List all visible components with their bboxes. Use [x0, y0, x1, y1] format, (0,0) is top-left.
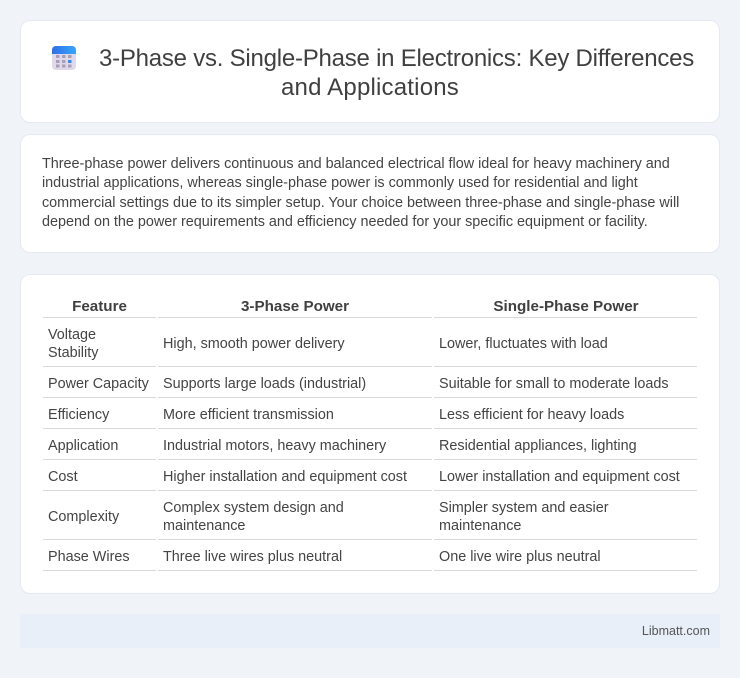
intro text: industrial applications, whereas single-phase power is commonly used for residential and light — [42, 175, 638, 191]
row: Voltage Stability: Stability — [48, 345, 98, 361]
column header: Single-Phase Power: Single-Phase Power — [493, 298, 639, 315]
row: Cost: Cost — [48, 469, 78, 485]
row: Efficiency — [48, 407, 624, 423]
row: Phase Wires: Phase Wires — [48, 549, 130, 565]
row: Complexity: Complexity — [48, 509, 119, 525]
row: Cost: Higher installation and equipment cost — [163, 469, 407, 485]
intro card — [20, 134, 720, 253]
intro text: commercial settings due to its simpler setup. Your choice between three-phase and single-phase will — [42, 195, 679, 211]
header card — [20, 20, 720, 123]
row: Efficiency: Efficiency — [48, 407, 109, 423]
row: Voltage Stability — [48, 327, 608, 361]
intro text: depend on the power requirements and efficiency needed for your specific equipment or facility. — [42, 214, 648, 230]
row: Efficiency: More efficient transmission — [163, 407, 334, 423]
row: Application: Application — [48, 438, 118, 454]
row: Phase Wires: Three live wires plus neutral — [163, 549, 342, 565]
row: Application: Residential appliances, lighting — [439, 438, 637, 454]
row: Voltage Stability: Voltage — [48, 327, 96, 343]
row: Voltage Stability: Lower, fluctuates with load — [439, 336, 608, 352]
footer bar — [20, 614, 720, 648]
row: Application: Industrial motors, heavy machinery — [163, 438, 386, 454]
row: Phase Wires — [48, 549, 601, 565]
row: Cost — [48, 469, 680, 485]
row: Power Capacity: Power Capacity — [48, 376, 149, 392]
row: Complexity: Complex system design and — [163, 500, 344, 516]
title — [99, 45, 694, 101]
title: and Applications — [281, 74, 459, 101]
column header: 3-Phase Power: 3-Phase Power — [241, 298, 349, 315]
row: Voltage Stability: High, smooth power delivery — [163, 336, 345, 352]
row: Complexity: maintenance — [163, 518, 245, 534]
row: Power Capacity — [48, 376, 669, 392]
row: Complexity: Simpler system and easier — [439, 500, 609, 516]
table card — [20, 274, 720, 594]
row: Complexity: maintenance — [439, 518, 521, 534]
row: Application — [48, 438, 637, 454]
row: Cost: Lower installation and equipment cost — [439, 469, 680, 485]
row: Efficiency: Less efficient for heavy loads — [439, 407, 624, 423]
row: Power Capacity: Supports large loads (industrial) — [163, 376, 366, 392]
footer credit: Libmatt.com — [642, 624, 710, 638]
icon: calendar grid — [52, 46, 76, 70]
row: Complexity — [48, 500, 609, 534]
intro text — [42, 156, 679, 230]
intro text: Three-phase power delivers continuous and balanced electrical flow ideal for heavy machinery and — [42, 156, 670, 172]
title: 3-Phase vs. Single-Phase in Electronics: Key Differences — [99, 45, 694, 72]
row: Phase Wires: One live wire plus neutral — [439, 549, 601, 565]
row: Power Capacity: Suitable for small to moderate loads — [439, 376, 669, 392]
column header: Feature: Feature — [72, 298, 127, 315]
